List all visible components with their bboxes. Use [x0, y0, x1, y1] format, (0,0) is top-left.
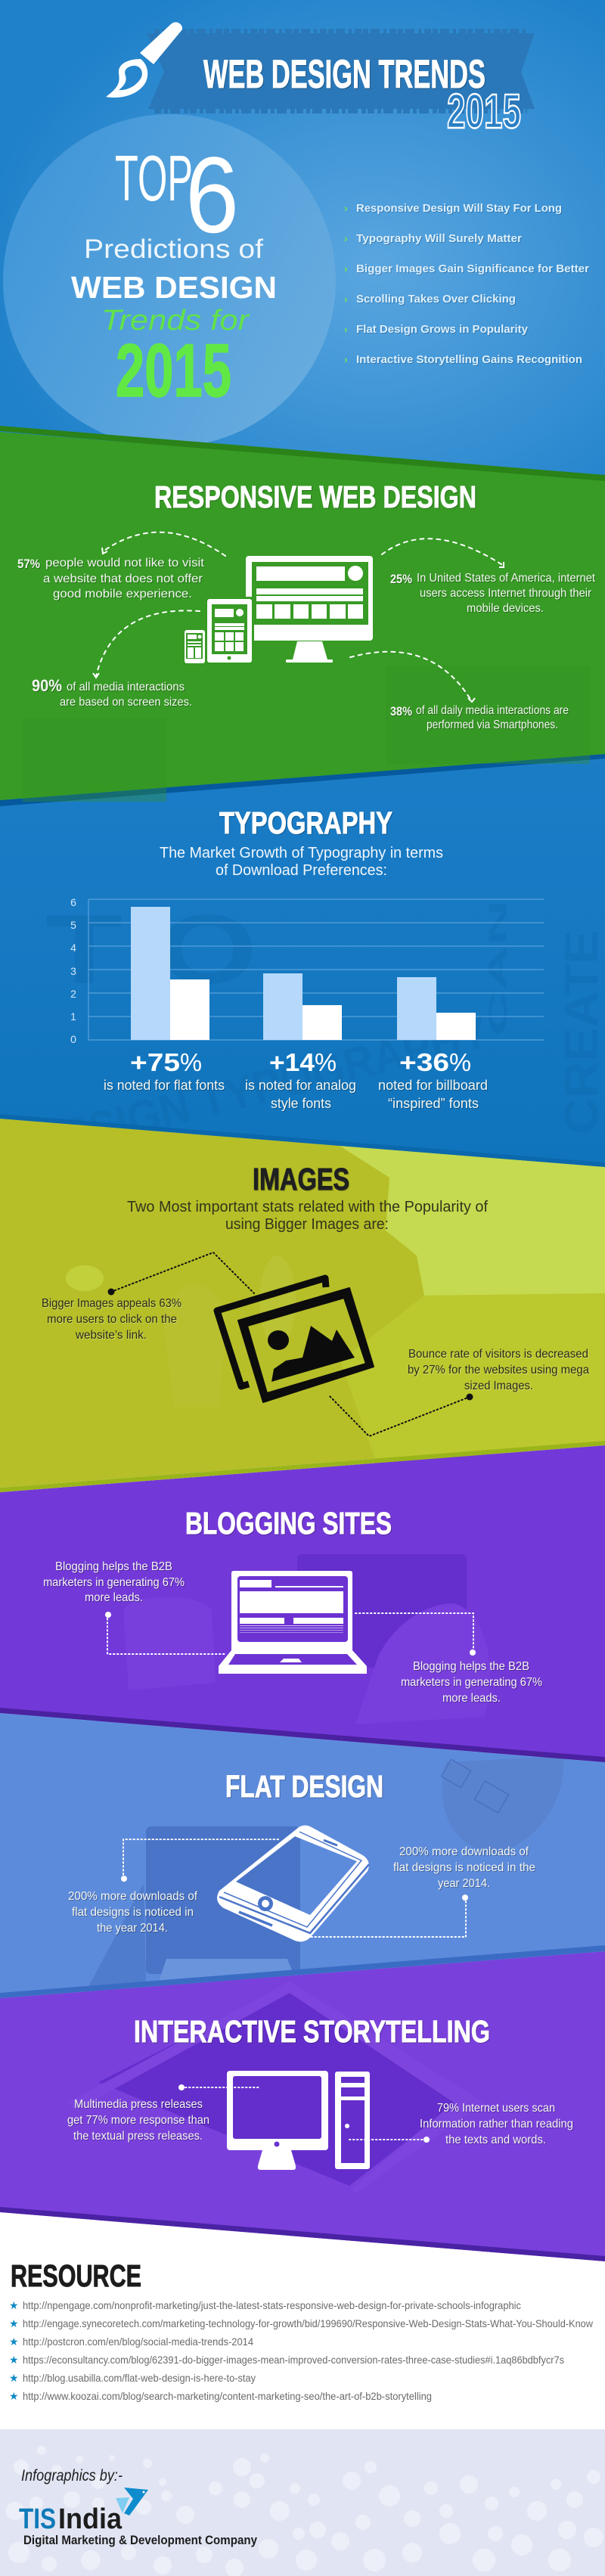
title year 2015 outlined: 2015	[447, 84, 521, 138]
callout: blogging left	[43, 1560, 225, 1654]
panel: header	[0, 0, 605, 484]
stat: +36%: %	[449, 1048, 471, 1076]
stat: 90%	[32, 676, 192, 709]
text: company tagline: Digital Marketing & Development Company	[23, 2533, 257, 2547]
stat: +14%: is noted for analog	[245, 1078, 356, 1093]
heading: RESOURCE	[11, 2258, 141, 2293]
stat: 90%: of all media interactions	[67, 681, 185, 694]
callout: flat left: the year 2014.	[97, 1922, 168, 1935]
stat: +36%: “inspired” fonts	[388, 1096, 479, 1111]
list: six predictions	[344, 202, 589, 366]
list: links: ★	[9, 2300, 19, 2312]
callout: flat left	[68, 1839, 278, 1935]
stat: +75%: is noted for flat fonts	[104, 1078, 225, 1093]
list: six predictions: ›	[344, 262, 348, 275]
stat: +36%	[378, 1048, 488, 1111]
list: six predictions: Flat Design Grows in Popularity	[356, 323, 529, 336]
stat: 57%: people would not like to visit	[45, 557, 205, 570]
background photo shapes	[66, 1146, 605, 1467]
bar chart: 2	[70, 988, 76, 1000]
list: links: ★	[9, 2318, 19, 2330]
background photo shapes	[68, 1982, 484, 2193]
bar chart: 4	[70, 942, 76, 954]
text: web design: WEB DESIGN	[71, 270, 277, 305]
faint background devices	[23, 666, 590, 802]
callout: blogging right: marketers in generating 67%	[401, 1676, 542, 1689]
list: links: ★	[9, 2354, 19, 2367]
callout: bigger images: website’s link.	[75, 1329, 147, 1342]
stat: 57%: good mobile experience.	[53, 588, 192, 601]
callout: 79%: the texts and words.	[445, 2134, 546, 2146]
icon: phone	[185, 630, 205, 663]
callout: multimedia: the textual press releases.	[73, 2130, 203, 2143]
list: six predictions: Bigger Images Gain Significance for Better	[356, 262, 589, 275]
heading: TYPOGRAPHY	[219, 805, 392, 840]
list: six predictions: Typography Will Surely Matter	[356, 232, 522, 245]
callout: multimedia: get 77% more response than	[67, 2114, 209, 2127]
callout: bounce rate: Bounce rate of visitors is decreased	[408, 1348, 588, 1361]
callout: blogging left: more leads.	[85, 1591, 143, 1604]
callout: 79%	[420, 2102, 573, 2146]
connector: right	[349, 2137, 430, 2143]
logo: TISIndia	[19, 2488, 148, 2535]
bar chart: 0	[70, 1033, 76, 1045]
icon: laptop	[219, 1571, 367, 1674]
heading: RESPONSIVE WEB DESIGN	[154, 480, 476, 514]
panel: flat design	[0, 1708, 605, 2004]
stat: +14%: %	[315, 1048, 337, 1076]
text: TOP: TOP	[115, 143, 193, 215]
list: six predictions: ›	[344, 323, 348, 335]
callout: 79%: Information rather than reading	[420, 2118, 573, 2131]
callout: flat right: flat designs is noticed in the	[393, 1861, 535, 1874]
icon: smartphone	[217, 1826, 369, 1941]
panel: images	[0, 1114, 605, 1488]
panel: typography	[0, 745, 605, 1172]
text: trends for: Trends for	[101, 305, 250, 337]
stat: 57%: a website that does not offer	[43, 573, 203, 585]
callout: bounce rate: by 27% for the websites using mega	[408, 1364, 589, 1376]
panel: footer	[0, 2429, 605, 2576]
callout: bounce rate	[328, 1348, 589, 1436]
stat: 38%: of all daily media interactions are	[416, 704, 569, 717]
arrows: dashed curves	[93, 532, 504, 702]
callout: bigger images: more users to click on the	[47, 1313, 177, 1326]
callout: flat left: 200% more downloads of	[68, 1890, 198, 1903]
connector: left	[178, 2084, 259, 2090]
band	[0, 1708, 605, 1762]
heading: INTERACTIVE STORYTELLING	[134, 2014, 490, 2049]
callout: bounce rate: sized Images.	[464, 1380, 533, 1392]
subtitle: using Bigger Images are:	[225, 1216, 389, 1233]
callout: blogging right	[355, 1613, 542, 1705]
background photo shapes	[83, 1756, 563, 2004]
stat: 90%: 90%	[32, 676, 62, 695]
stat: 25%	[390, 572, 596, 615]
stat: +75%	[104, 1048, 225, 1093]
subtitle	[160, 845, 443, 879]
stat: 25%: 25%	[390, 572, 412, 586]
band	[0, 1114, 605, 1167]
stat: +14%	[245, 1048, 356, 1111]
heading: BLOGGING SITES	[185, 1506, 392, 1541]
callout: multimedia: Multimedia press releases	[74, 2098, 203, 2111]
stat: +36%: +36	[399, 1048, 449, 1076]
background bubbles	[6, 2446, 603, 2576]
band	[0, 1441, 605, 1492]
logo: TISIndia: TIS	[19, 2503, 56, 2535]
panel: resource	[0, 2207, 605, 2429]
text: infographics by: Infographics by:-	[21, 2467, 123, 2484]
bar chart: 6	[70, 896, 76, 908]
list: six predictions: ›	[344, 353, 348, 365]
stat: +36%: noted for billboard	[378, 1078, 488, 1093]
list: links: ★	[9, 2391, 19, 2403]
panel: responsive web design	[0, 426, 605, 802]
band	[0, 754, 605, 806]
stat: +75%: +75	[130, 1048, 180, 1076]
panel: blogging sites	[0, 1441, 605, 1762]
callout: multimedia	[67, 2098, 209, 2143]
text: green 2015: 2015	[116, 328, 231, 412]
text: 6: 6	[185, 135, 239, 256]
list: six predictions: Scrolling Takes Over Clicking	[356, 293, 516, 306]
list: links	[9, 2299, 594, 2403]
heading: IMAGES	[253, 1162, 349, 1196]
stat: 25%: In United States of America, internet	[417, 572, 596, 585]
stat: 25%: mobile devices.	[467, 602, 544, 615]
band	[0, 1945, 605, 1998]
stat: 38%	[390, 704, 569, 731]
icon: pictures	[217, 1278, 374, 1402]
list: six predictions: ›	[344, 202, 348, 214]
stat: +75%: %	[180, 1048, 202, 1076]
callout: 79%: 79% Internet users scan	[437, 2102, 555, 2115]
heading: FLAT DESIGN	[225, 1769, 383, 1804]
list: six predictions: ›	[344, 293, 348, 305]
list: links: ★	[9, 2373, 19, 2385]
stat: +14%: +14	[269, 1048, 315, 1076]
callout: blogging left: Blogging helps the B2B	[55, 1560, 172, 1573]
stat: 57%	[17, 557, 205, 601]
callout: blogging left: marketers in generating 67%	[43, 1576, 185, 1589]
icon: desktop computer	[227, 2071, 370, 2170]
list: six predictions: Interactive Storytelling Gains Recognition	[356, 353, 582, 366]
callout: flat right: 200% more downloads of	[399, 1845, 529, 1858]
icon: desktop monitor	[246, 556, 373, 663]
background word texture	[26, 894, 605, 1169]
list: links: ★	[9, 2336, 19, 2348]
banner ribbon	[147, 32, 535, 110]
subtitle	[127, 1199, 488, 1233]
list: six predictions: ›	[344, 232, 348, 244]
callout: flat right	[311, 1845, 535, 1937]
list: six predictions: Responsive Design Will Stay For Long	[356, 202, 562, 215]
subtitle: Two Most important stats related with the Popularity of	[127, 1199, 488, 1215]
callout: flat left: flat designs is noticed in	[72, 1906, 194, 1919]
bar chart	[70, 896, 544, 1045]
callout: bigger images	[42, 1252, 254, 1342]
stat: 57%: 57%	[17, 557, 40, 571]
text: predictions of: Predictions of	[84, 234, 263, 264]
subtitle: The Market Growth of Typography in terms	[160, 845, 443, 861]
list: links: https://econsultancy.com/blog/62391-do-bigger-images-mean-improved-conversion-rates-three-case-studies#i.1aq86bdbfycr7s	[23, 2354, 564, 2366]
list: links: http://blog.usabilla.com/flat-web-design-is-here-to-stay	[23, 2372, 256, 2384]
bar chart: 1	[70, 1010, 76, 1023]
icon: tablet	[205, 597, 254, 665]
stat: 90%: are based on screen sizes.	[60, 696, 192, 709]
callout: bigger images: Bigger Images appeals 63%	[42, 1297, 182, 1310]
background word texture: TIO	[45, 894, 257, 1004]
stat: +14%: style fonts	[271, 1096, 331, 1111]
callout: blogging right: more leads.	[442, 1692, 501, 1705]
stat: 38%: 38%	[390, 704, 412, 718]
background word texture: DESIGN TYPOGRAPHY	[26, 1007, 493, 1169]
stat: 38%: performed via Smartphones.	[427, 718, 558, 731]
logo: TISIndia: India	[58, 2503, 123, 2535]
subtitle: of Download Preferences:	[216, 862, 387, 879]
callout: blogging right: Blogging helps the B2B	[413, 1660, 529, 1673]
icon: paint brush	[106, 22, 182, 98]
panel: interactive storytelling	[0, 1945, 605, 2261]
background photo shapes	[123, 1554, 490, 1724]
bar chart: 5	[70, 919, 76, 931]
circle	[3, 114, 336, 447]
list: links: http://npengage.com/nonprofit-marketing/just-the-latest-stats-responsive-web-design-for-private-schools-infographic	[23, 2299, 521, 2311]
band	[0, 2207, 605, 2261]
callout: flat right: year 2014.	[438, 1877, 490, 1890]
list: links: http://www.koozai.com/blog/search-marketing/content-marketing-seo/the-art-of-b2b-storytelling	[23, 2390, 432, 2402]
bar chart: 3	[70, 965, 76, 977]
background word texture: CAN	[484, 900, 513, 1036]
stat: 25%: users access Internet through their	[420, 587, 592, 600]
list: links: http://postcron.com/en/blog/social-media-trends-2014	[23, 2335, 253, 2348]
